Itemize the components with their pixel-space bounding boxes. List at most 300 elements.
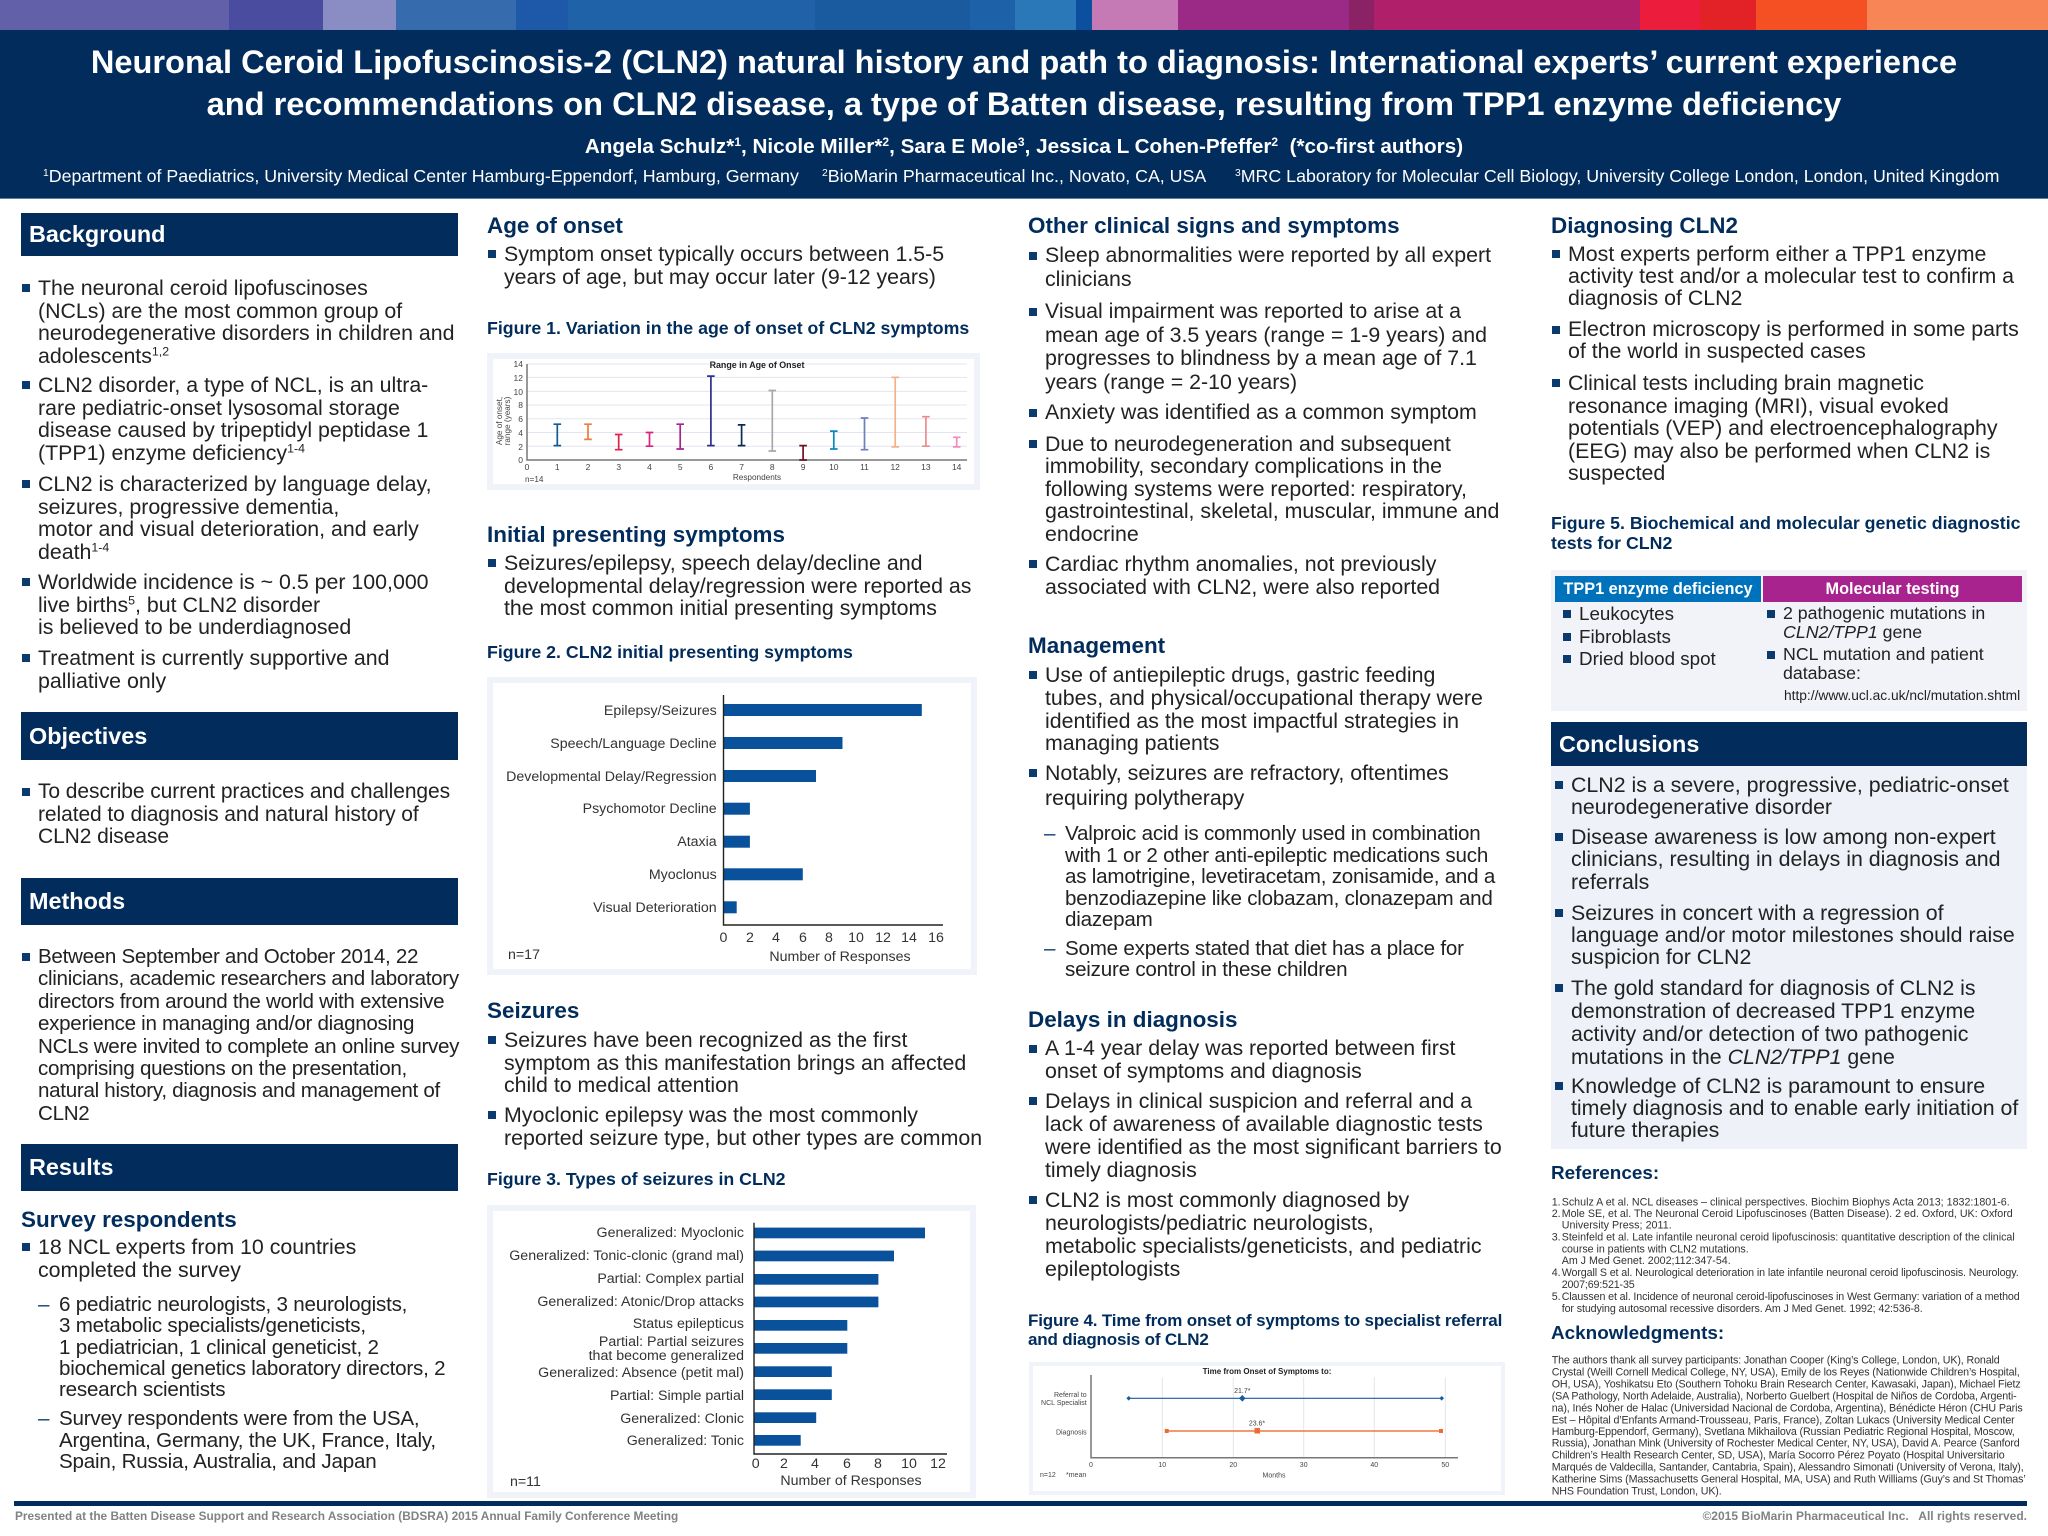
conference note: Presented at the Batten Disease Support and Research Association (BDSRA) 2015 Annual Family Conference Meeting: [15, 1509, 678, 1523]
affiliations: 3MRC Laboratory for Molecular Cell Biology, University College London, London, United Kingdom: [1235, 166, 1999, 186]
bullet: suspicion: [1571, 902, 2015, 968]
bullet: who diagnoses: metabolic specialists/geneticists, and pediatric: [1045, 1234, 1482, 1258]
bullet: enzyme test: Most experts perform either a TPP1 enzyme: [1568, 242, 1986, 266]
heading: objectives: Objectives: [29, 722, 147, 748]
chart: time from onset: [1029, 1362, 1505, 1495]
bullet: who diagnoses: CLN2 is most commonly diagnosed by: [1045, 1188, 1409, 1212]
sub-bullet: valproic acid: as lamotrigine, levetiracetam, zonisamide, and a: [1065, 865, 1495, 888]
chart: time from onset: Diagnosis: [1056, 1430, 1087, 1436]
bullet: suspicion: suspicion for CLN2: [1571, 945, 1751, 969]
bar chart: initial presenting symptoms: Psychomotor Decline: [583, 801, 717, 817]
database url: http://www.ucl.ac.uk/ncl/mutation.shtml: [1784, 688, 2020, 703]
bullet: method: natural history, diagnosis and management of: [38, 1079, 440, 1102]
sub-bullet: specialties: biochemical genetics laboratory directors, 2: [59, 1357, 445, 1380]
acknowledgments text: Marqués de Valdecilla, Santander, Cantabria, Spain), Alessandro Simonati (University of Verona, Italy),: [1552, 1462, 2024, 1474]
bullet: myoclonic epilepsy: [504, 1104, 982, 1149]
heading: management: Management: [1028, 633, 1165, 658]
chart: time from onset: n=12: [1040, 1472, 1056, 1479]
sub-bullet: countries: Survey respondents were from the USA,: [59, 1407, 419, 1430]
bar chart: types of seizures: 8: [874, 1456, 882, 1472]
bullet: strategies: [1045, 664, 1483, 755]
heading: acknowledgments: Acknowledgments:: [1551, 1323, 1724, 1344]
top colour strip: [0, 0, 2048, 30]
reference list: Am J Med Genet. 2002;112:347-54.: [1562, 1255, 1731, 1267]
bullet: NCL definition: (NCLs) are the most common group of: [38, 299, 402, 323]
bar chart: types of seizures: Status epilepticus: [633, 1316, 744, 1332]
sub-bullet: valproic acid: with 1 or 2 other anti-epileptic medications such: [1065, 844, 1488, 867]
reference list: 1.: [1552, 1196, 1561, 1208]
bar chart: types of seizures: [487, 1205, 976, 1498]
bar chart: types of seizures: 0: [752, 1456, 760, 1472]
bar chart: types of seizures: Generalized: Myoclonic: [597, 1225, 744, 1241]
bullet: gold standard: [1571, 977, 1976, 1069]
bullet: sleep: clinicians: [1045, 267, 1132, 291]
bullet: suspicion: Seizures in concert with a regression of: [1571, 901, 1944, 925]
figure 4 title: [1028, 1311, 1502, 1349]
bar chart: types of seizures: Partial: Simple partial: [610, 1388, 744, 1404]
bullet: electron microscopy: [1568, 319, 2019, 362]
acknowledgments text: Children’s Health Research Center, SD, USA), María Socorro Pérez Poyato (Hospital Universitario: [1552, 1450, 2005, 1462]
heading: background: Background: [29, 221, 165, 247]
bullet: electron microscopy: Electron microscopy is performed in some parts: [1568, 317, 2019, 341]
bullet: barriers: lack of awareness of available diagnostic tests: [1045, 1112, 1483, 1136]
bullet: incidence: [38, 571, 429, 639]
bar chart: initial presenting symptoms: 12: [875, 930, 891, 946]
list: pathogenic mutations: 2 pathogenic mutations in: [1783, 603, 1985, 623]
bullet: severe disorder: [1571, 774, 2009, 818]
affiliations: [43, 166, 1999, 186]
reference list: Steinfeld et al. Late infantile neuronal ceroid lipofuscinosis: quantitative description of the clinical: [1562, 1231, 2015, 1243]
reference list: course in patients with CLN2 mutations.: [1562, 1243, 1749, 1255]
bullet: visual impairment: [1045, 300, 1487, 394]
acknowledgments text: Hamburg-Eppendorf, Germany), Svetlana Mikhailova (Russian Pediatric Regional Hospital, Moscow,: [1552, 1426, 2015, 1438]
bullet: NCL definition: neurodegenerative disorders in children and: [38, 321, 454, 345]
heading: other clinical signs: Other clinical signs and symptoms: [1028, 213, 1400, 238]
reference list: 3.: [1552, 1231, 1561, 1243]
bar chart: types of seizures: Generalized: Absence (petit mal): [538, 1365, 744, 1381]
bullet: clinical tests: (EEG) may also be performed when CLN2 is: [1568, 439, 1990, 463]
bullet: myoclonic epilepsy: Myoclonic epilepsy was the most commonly: [504, 1103, 918, 1127]
bullet: barriers: were identified as the most significant barriers to: [1045, 1135, 1502, 1159]
bullet: NCL definition: [38, 277, 454, 367]
chart: range in age of onset: 12: [514, 373, 523, 383]
sub-bullet: countries: Argentina, Germany, the UK, France, Italy,: [59, 1428, 436, 1452]
bar chart: initial presenting symptoms: 8: [825, 930, 833, 946]
bullet: method: comprising questions on the presentation,: [38, 1057, 407, 1080]
heading: seizures: Seizures: [487, 998, 579, 1023]
bullet: treatment: [38, 647, 390, 692]
bullet: secondary complications: endocrine: [1045, 522, 1139, 546]
bar chart: types of seizures: 4: [811, 1456, 819, 1472]
bullet: CLN2 disorder: rare pediatric-onset lysosomal storage: [38, 396, 400, 420]
bullet: refractory seizures: Notably, seizures are refractory, oftentimes: [1045, 761, 1449, 785]
sub-bullet: diet: seizure control in these children: [1065, 958, 1347, 981]
chart: range in age of onset: Respondents: [733, 473, 781, 482]
bullet: knowledge: timely diagnosis and to enable early initiation of: [1571, 1096, 2018, 1120]
authors: Angela Schulz*1, Nicole Miller*2, Sara E Mole3, Jessica L Cohen-Pfeffer2 (*co-first authors): [585, 135, 1463, 158]
chart: range in age of onset: 12: [890, 462, 900, 472]
chart: range in age of onset: 2: [518, 442, 523, 452]
heading: conclusions: Conclusions: [1559, 730, 1699, 756]
bar chart: types of seizures: Partial: Complex partial: [597, 1271, 744, 1287]
sub-bullet: countries: Spain, Russia, Australia, and Japan: [59, 1450, 376, 1473]
column header: TPP1 enzyme deficiency: TPP1 enzyme deficiency: [1563, 580, 1753, 598]
bullet: clinical tests: resonance imaging (MRI), visual evoked: [1568, 394, 1949, 418]
bullet: presenting symptoms: [504, 552, 971, 620]
bullet: refractory seizures: [1045, 761, 1449, 811]
bullet: enzyme test: activity test and/or a molecular test to confirm a: [1568, 264, 2014, 288]
sub-bullet: specialties: 1 pediatrician, 1 clinical geneticist, 2: [59, 1336, 379, 1359]
bullet: respondents: 18 NCL experts from 10 countries: [38, 1235, 356, 1259]
bullet: objective: [38, 781, 450, 849]
bullet: anxiety: Anxiety was identified as a common symptom: [1045, 400, 1477, 424]
chart: range in age of onset: 13: [921, 462, 931, 472]
chart: range in age of onset: 4: [647, 462, 652, 472]
bullet: objective: To describe current practices and challenges: [38, 780, 450, 803]
affiliations: 1Department of Paediatrics, University Medical Center Hamburg-Eppendorf, Hamburg, Germany: [43, 166, 799, 186]
panel: management: [1028, 633, 1496, 981]
bullet: awareness: [1571, 826, 2000, 893]
bullet: first symptom: [504, 1029, 966, 1097]
chart: time from onset: Months: [1263, 1472, 1286, 1480]
bullet: gold standard: demonstration of decreased TPP1 enzyme: [1571, 999, 1975, 1023]
panel: other clinical signs and symptoms: [1028, 213, 1499, 599]
heading: objectives: [21, 712, 458, 760]
heading: delays in diagnosis: Delays in diagnosis: [1028, 1007, 1238, 1032]
bullet: cardiac: [1045, 553, 1440, 598]
bullet: enzyme test: [1568, 243, 2014, 310]
bullet: CLN2 disorder: CLN2 disorder, a type of NCL, is an ultra-: [38, 373, 428, 397]
bullet: sleep: [1045, 244, 1491, 291]
chart: time from onset: 10: [1158, 1462, 1166, 1469]
chart: range in age of onset: 4: [518, 428, 523, 438]
list: mutation database: [1783, 645, 1984, 683]
sub-bullet: valproic acid: [1065, 823, 1495, 931]
bullet: incidence: is believed to be underdiagnosed: [38, 615, 351, 639]
bullet: enzyme test: diagnosis of CLN2: [1568, 286, 1742, 310]
bullet: NCL definition: The neuronal ceroid lipofuscinoses: [38, 276, 368, 300]
bar chart: initial presenting symptoms: 0: [720, 930, 728, 946]
acknowledgments text: The authors thank all survey participants: Jonathan Cooper (King’s College, London, UK), Ronald: [1552, 1355, 2000, 1367]
panel: seizures: [487, 998, 982, 1498]
bar chart: types of seizures: Number of Responses: [780, 1473, 922, 1489]
acknowledgments text: na), Inés Noher de Halac (Universidad Nacional de Cordoba, Argentina), Bénédicte Héron (CHU Paris: [1552, 1403, 2023, 1415]
bar chart: initial presenting symptoms: Developmental Delay/Regression: [506, 769, 717, 785]
acknowledgments text: Crystal (Weill Cornell Medical College, NY, USA), Emily de los Reyes (Nationwide Children’s Hospital,: [1552, 1367, 2020, 1379]
bullet: method: clinicians, academic researchers and laboratory: [38, 967, 459, 990]
bar chart: initial presenting symptoms: n=17: [508, 947, 540, 963]
chart: time from onset: *mean: [1066, 1472, 1086, 1479]
bullet: treatment: palliative only: [38, 669, 166, 693]
chart: range in age of onset: range (years): [503, 396, 512, 445]
bullet: secondary complications: immobility, secondary complications in the: [1045, 454, 1442, 478]
bullet: characteristics: death1-4: [38, 540, 109, 564]
bullet: characteristics: CLN2 is characterized by language delay,: [38, 472, 432, 496]
bullet: gold standard: The gold standard for diagnosis of CLN2 is: [1571, 976, 1976, 1000]
bullet: first symptom: child to medical attention: [504, 1073, 739, 1097]
panel: methods: [21, 878, 460, 1125]
bullet: secondary complications: gastrointestinal, skeletal, muscular, immune and: [1045, 499, 1499, 523]
bullet: clinical tests: suspected: [1568, 461, 1665, 485]
bar chart: types of seizures: Generalized: Atonic/Drop attacks: [537, 1294, 744, 1310]
acknowledgments text: OH, USA), Yoshikatsu Eto (Southern Tohoku Brain Research Center, Kawasaki, Japan), Michael Fietz: [1552, 1379, 2021, 1391]
panel: results: [21, 1144, 458, 1473]
title: Neuronal Ceroid Lipofuscinosis-2 (CLN2) natural history and path to diagnosis: International experts’ current experience: [91, 43, 1957, 80]
bullet: onset: years of age, but may occur later (9-12 years): [504, 265, 936, 289]
chart: time from onset: 21.7*: [1234, 1388, 1251, 1395]
bullet: knowledge: future therapies: [1571, 1118, 1719, 1142]
chart: time from onset: 30: [1300, 1462, 1308, 1469]
bullet: clinical tests: Clinical tests including brain magnetic: [1568, 371, 1924, 395]
chart: range in age of onset: 14: [952, 462, 962, 472]
acknowledgments text: NHS Foundation Trust, London, UK).: [1552, 1486, 1722, 1498]
bullet: method: experience in managing and/or diagnosing: [38, 1012, 414, 1035]
panel: delays in diagnosis: [1028, 1007, 1502, 1281]
list: pathogenic mutations: [1783, 604, 1985, 643]
bullet: cardiac: associated with CLN2, were also reported: [1045, 575, 1440, 599]
sub-bullet: specialties: 6 pediatric neurologists, 3 neurologists,: [59, 1293, 407, 1316]
table: diagnostic tests: [1551, 570, 2027, 711]
bullet: strategies: tubes, and physical/occupational therapy were: [1045, 686, 1483, 710]
chart: range in age of onset: 3: [616, 462, 621, 472]
panel: figure 5: [1551, 513, 2027, 711]
bar chart: types of seizures: Generalized: Tonic: [627, 1433, 744, 1449]
bar chart: initial presenting symptoms: 16: [928, 930, 944, 946]
chart: range in age of onset: 0: [525, 462, 530, 472]
chart: range in age of onset: 2: [586, 462, 591, 472]
chart: range in age of onset: 7: [739, 462, 744, 472]
sub-bullet: specialties: 3 metabolic specialists/geneticists,: [59, 1314, 366, 1337]
bullet: incidence: live births5, but CLN2 disorder: [38, 593, 320, 617]
figure 1 title: Figure 1. Variation in the age of onset of CLN2 symptoms: [487, 318, 969, 338]
bar chart: initial presenting symptoms: 2: [746, 930, 754, 946]
chart: range in age of onset: 10: [829, 462, 839, 472]
heading: results: [21, 1144, 458, 1191]
bar chart: initial presenting symptoms: [487, 677, 977, 975]
chart: range in age of onset: 1: [555, 462, 560, 472]
bullet: cardiac: Cardiac rhythm anomalies, not previously: [1045, 552, 1436, 576]
bullet: electron microscopy: of the world in suspected cases: [1568, 339, 1866, 363]
reference list: University Press; 2011.: [1562, 1220, 1672, 1232]
bullet: severe disorder: neurodegenerative disorder: [1571, 795, 1832, 819]
bullet: objective: related to diagnosis and natural history of: [38, 803, 419, 826]
bullet: strategies: Use of antiepileptic drugs, gastric feeding: [1045, 663, 1435, 687]
bullet: respondents: completed the survey: [38, 1258, 241, 1282]
chart: range in age of onset: 11: [860, 462, 869, 472]
bar chart: initial presenting symptoms: Speech/Language Decline: [550, 736, 717, 752]
list: mutation database: NCL mutation and patient: [1783, 644, 1984, 664]
chart: range in age of onset: Age of onset,: [495, 397, 504, 445]
reference list: 2007;69:521-35: [1562, 1279, 1635, 1291]
bullet: refractory seizures: requiring polytherapy: [1045, 786, 1244, 810]
bullet: barriers: [1045, 1090, 1502, 1182]
heading: conclusions: [1551, 722, 2027, 766]
column header: molecular testing: [1763, 576, 2022, 602]
bar chart: initial presenting symptoms: Ataxia: [677, 834, 717, 850]
bar chart: initial presenting symptoms: Number of Responses: [769, 949, 911, 965]
reference list: Mole SE, et al. The Neuronal Ceroid Lipofuscinoses (Batten Disease). 2 ed. Oxford, UK: Oxford: [1562, 1208, 2013, 1220]
bullet: secondary complications: following systems were reported: respiratory,: [1045, 477, 1467, 501]
sub-bullet: diet: [1065, 938, 1464, 980]
chart: time from onset: Referral to: [1054, 1392, 1087, 1399]
chart: range in age of onset: 9: [801, 462, 806, 472]
bullet: CLN2 disorder: [38, 374, 428, 464]
bullet: treatment: Treatment is currently supportive and: [38, 646, 390, 670]
bullet: method: NCLs were invited to complete an online survey: [38, 1035, 459, 1058]
bullet: CLN2 disorder: (TPP1) enzyme deficiency1-4: [38, 441, 305, 465]
panel: figure 4: [1028, 1311, 1505, 1495]
heading: initial presenting symptoms: Initial presenting symptoms: [487, 522, 785, 547]
footer rule: [14, 1501, 2027, 1506]
bar chart: types of seizures: Generalized: Tonic-clonic (grand mal): [509, 1248, 744, 1264]
acknowledgments text: Est – Hôpital d’Enfants Armand-Trousseau, Paris, France), Zoltan Lukacs (University Medical Center: [1552, 1414, 2015, 1426]
panel: initial presenting symptoms: [487, 522, 977, 975]
panel: references: [1551, 1163, 2020, 1315]
bullet: onset: [504, 243, 944, 288]
chart: range in age of onset: 14: [514, 359, 523, 369]
sub-bullet: specialties: research scientists: [59, 1378, 225, 1401]
reference list: 5.: [1552, 1291, 1561, 1303]
chart: range in age of onset: 5: [678, 462, 683, 472]
figure 5 title: [1551, 513, 2021, 553]
chart: range in age of onset: 0: [518, 455, 523, 465]
bullet: who diagnoses: epileptologists: [1045, 1257, 1180, 1281]
chart: time from onset: 23.6*: [1249, 1420, 1265, 1428]
heading: methods: [21, 878, 458, 925]
bar chart: types of seizures: that become generalized: [589, 1348, 744, 1364]
list: pathogenic mutations: CLN2/TPP1 gene: [1783, 622, 1922, 642]
panel: conclusions: [1551, 722, 2027, 1149]
bullet: CLN2 disorder: disease caused by tripeptidyl peptidase 1: [38, 418, 428, 442]
bullet: visual impairment: Visual impairment was reported to arise at a: [1045, 299, 1461, 323]
bar chart: types of seizures: 12: [930, 1456, 946, 1472]
chart: time from onset: 20: [1229, 1462, 1237, 1469]
bullet: gold standard: activity and/or detection of two pathogenic: [1571, 1022, 1968, 1046]
reference list: 2.: [1552, 1208, 1561, 1220]
reference list: Claussen et al. Incidence of neuronal ceroid-lipofuscinoses in West Germany: variation of a method: [1562, 1291, 2020, 1303]
panel: acknowledgments: [1551, 1323, 2026, 1498]
panel: diagnosing CLN2: [1551, 213, 2019, 485]
figure 5 title: Figure 5. Biochemical and molecular genetic diagnostic: [1551, 513, 2021, 533]
chart: range in age of onset: 8: [518, 400, 523, 410]
acknowledgments text: [1552, 1355, 2026, 1498]
bullet: knowledge: Knowledge of CLN2 is paramount to ensure: [1571, 1074, 1985, 1098]
bar chart: initial presenting symptoms: Visual Deterioration: [593, 900, 717, 916]
heading: background: [21, 213, 458, 256]
bullet: method: Between September and October 2014, 22: [38, 945, 418, 968]
bar chart: types of seizures: Partial: Partial seizures: [599, 1334, 744, 1350]
reference list: for studying autosomal recessive disorders. Am J Med Genet. 1992; 42:536-8.: [1562, 1303, 1923, 1315]
bullet: sleep: Sleep abnormalities were reported by all expert: [1045, 243, 1491, 267]
bullet: method: CLN2: [38, 1102, 89, 1125]
heading: results: Results: [29, 1154, 114, 1180]
bullet: knowledge: [1571, 1075, 2018, 1142]
bullet: barriers: Delays in clinical suspicion and referral and a: [1045, 1089, 1472, 1113]
bullet: presenting symptoms: Seizures/epilepsy, speech delay/decline and: [504, 551, 922, 575]
heading: methods: Methods: [29, 888, 125, 914]
column header: TPP1 enzyme deficiency: [1555, 576, 1761, 602]
bullet: first symptom: Seizures have been recognized as the first: [504, 1028, 907, 1052]
bar chart: types of seizures: Generalized: Clonic: [620, 1411, 744, 1427]
subheading: survey respondents: Survey respondents: [21, 1207, 237, 1232]
acknowledgments text: Russia), Jonathan Mink (University of Rochester Medical Center, NY, USA), David A. Pearce (Sanford: [1552, 1438, 2020, 1450]
bullet: gold standard: mutations in the CLN2/TPP1 gene: [1571, 1045, 1895, 1069]
bullet: characteristics: [38, 473, 432, 563]
bullet: awareness: clinicians, resulting in delays in diagnosis and: [1571, 847, 2000, 871]
bullet: objective: CLN2 disease: [38, 825, 169, 848]
bullet: clinical tests: potentials (VEP) and electroencephalography: [1568, 416, 1998, 440]
bullet: delay length: onset of symptoms and diagnosis: [1045, 1059, 1362, 1083]
affiliations: 2BioMarin Pharmaceutical Inc., Novato, CA, USA: [822, 166, 1206, 186]
list: fibroblasts: Fibroblasts: [1579, 626, 1671, 647]
bullet: myoclonic epilepsy: reported seizure type, but other types are common: [504, 1126, 982, 1150]
chart: range in age of onset: 6: [518, 414, 523, 424]
title: and recommendations on CLN2 disease, a type of Batten disease, resulting from TPP1 enzyme deficiency: [207, 84, 1841, 122]
bullet: visual impairment: years (range = 2-10 years): [1045, 370, 1297, 394]
chart: range in age of onset: 8: [770, 462, 775, 472]
sub-bullet: valproic acid: diazepam: [1065, 908, 1153, 931]
bullet: strategies: managing patients: [1045, 731, 1219, 755]
chart: time from onset: 0: [1089, 1462, 1093, 1469]
bullet: secondary complications: Due to neurodegeneration and subsequent: [1045, 432, 1451, 456]
chart: range in age of onset: [487, 353, 980, 490]
figure 3 title: Figure 3. Types of seizures in CLN2: [487, 1169, 786, 1189]
bullet: characteristics: motor and visual deterioration, and early: [38, 517, 419, 541]
bullet: method: directors from around the world with extensive: [38, 990, 444, 1013]
bullet: barriers: timely diagnosis: [1045, 1158, 1197, 1182]
chart: time from onset: 50: [1441, 1462, 1449, 1469]
bar chart: initial presenting symptoms: 6: [799, 930, 807, 946]
bullet: method: [38, 946, 459, 1125]
bar chart: initial presenting symptoms: Epilepsy/Seizures: [604, 703, 717, 719]
reference list: 4.: [1552, 1267, 1561, 1279]
bullet: who diagnoses: [1045, 1189, 1482, 1281]
bullet: respondents: [38, 1236, 356, 1281]
heading: references: References:: [1551, 1163, 1659, 1184]
bullet: delay length: [1045, 1037, 1456, 1083]
bullet: severe disorder: CLN2 is a severe, progressive, pediatric-onset: [1571, 773, 2009, 797]
bar chart: initial presenting symptoms: 14: [901, 930, 917, 946]
chart: time from onset: Time from Onset of Symptoms to:: [1203, 1367, 1331, 1376]
figure 4 title: and diagnosis of CLN2: [1028, 1330, 1209, 1349]
bullet: incidence: Worldwide incidence is ~ 0.5 per 100,000: [38, 570, 429, 594]
chart: range in age of onset: 6: [709, 462, 714, 472]
reference list: Worgall S et al. Neurological deterioration in late infantile neuronal ceroid lipofuscinosis. Neurology.: [1562, 1267, 2019, 1279]
reference list: Schulz A et al. NCL diseases – clinical perspectives. Biochim Biophys Acta 2013; 1832:1801-6.: [1562, 1196, 2010, 1208]
bullet: NCL definition: adolescents1,2: [38, 344, 169, 368]
copyright: ©2015 BioMarin Pharmaceutical Inc. All rights reserved.: [1702, 1509, 2027, 1523]
column header: molecular testing: Molecular testing: [1826, 580, 1959, 598]
figure 4 title: Figure 4. Time from onset of symptoms to specialist referral: [1028, 1311, 1502, 1330]
chart: time from onset: NCL Specialist: [1041, 1400, 1087, 1407]
figure 2 title: Figure 2. CLN2 initial presenting symptoms: [487, 642, 853, 662]
bar chart: types of seizures: n=11: [510, 1474, 541, 1490]
sub-bullet: valproic acid: benzodiazepine like clobazam, clonazepam and: [1065, 887, 1493, 910]
sub-bullet: countries: [59, 1408, 436, 1472]
list: leukocytes: Leukocytes: [1579, 603, 1674, 624]
bullet: awareness: Disease awareness is low among non-expert: [1571, 825, 1996, 849]
footer: [14, 1501, 2027, 1523]
bullet: presenting symptoms: developmental delay/regression were reported as: [504, 574, 971, 598]
bullet: secondary complications: [1045, 433, 1499, 545]
bullet: awareness: referrals: [1571, 870, 1649, 894]
bullet: visual impairment: progresses to blindness by a mean age of 7.1: [1045, 346, 1477, 370]
bullet: characteristics: seizures, progressive dementia,: [38, 495, 339, 519]
bullet: strategies: identified as the most impactful strategies in: [1045, 709, 1459, 733]
panel: objectives: [21, 712, 458, 848]
chart: range in age of onset: Range in Age of Onset: [710, 360, 804, 370]
list: dried blood spot: Dried blood spot: [1579, 648, 1716, 669]
